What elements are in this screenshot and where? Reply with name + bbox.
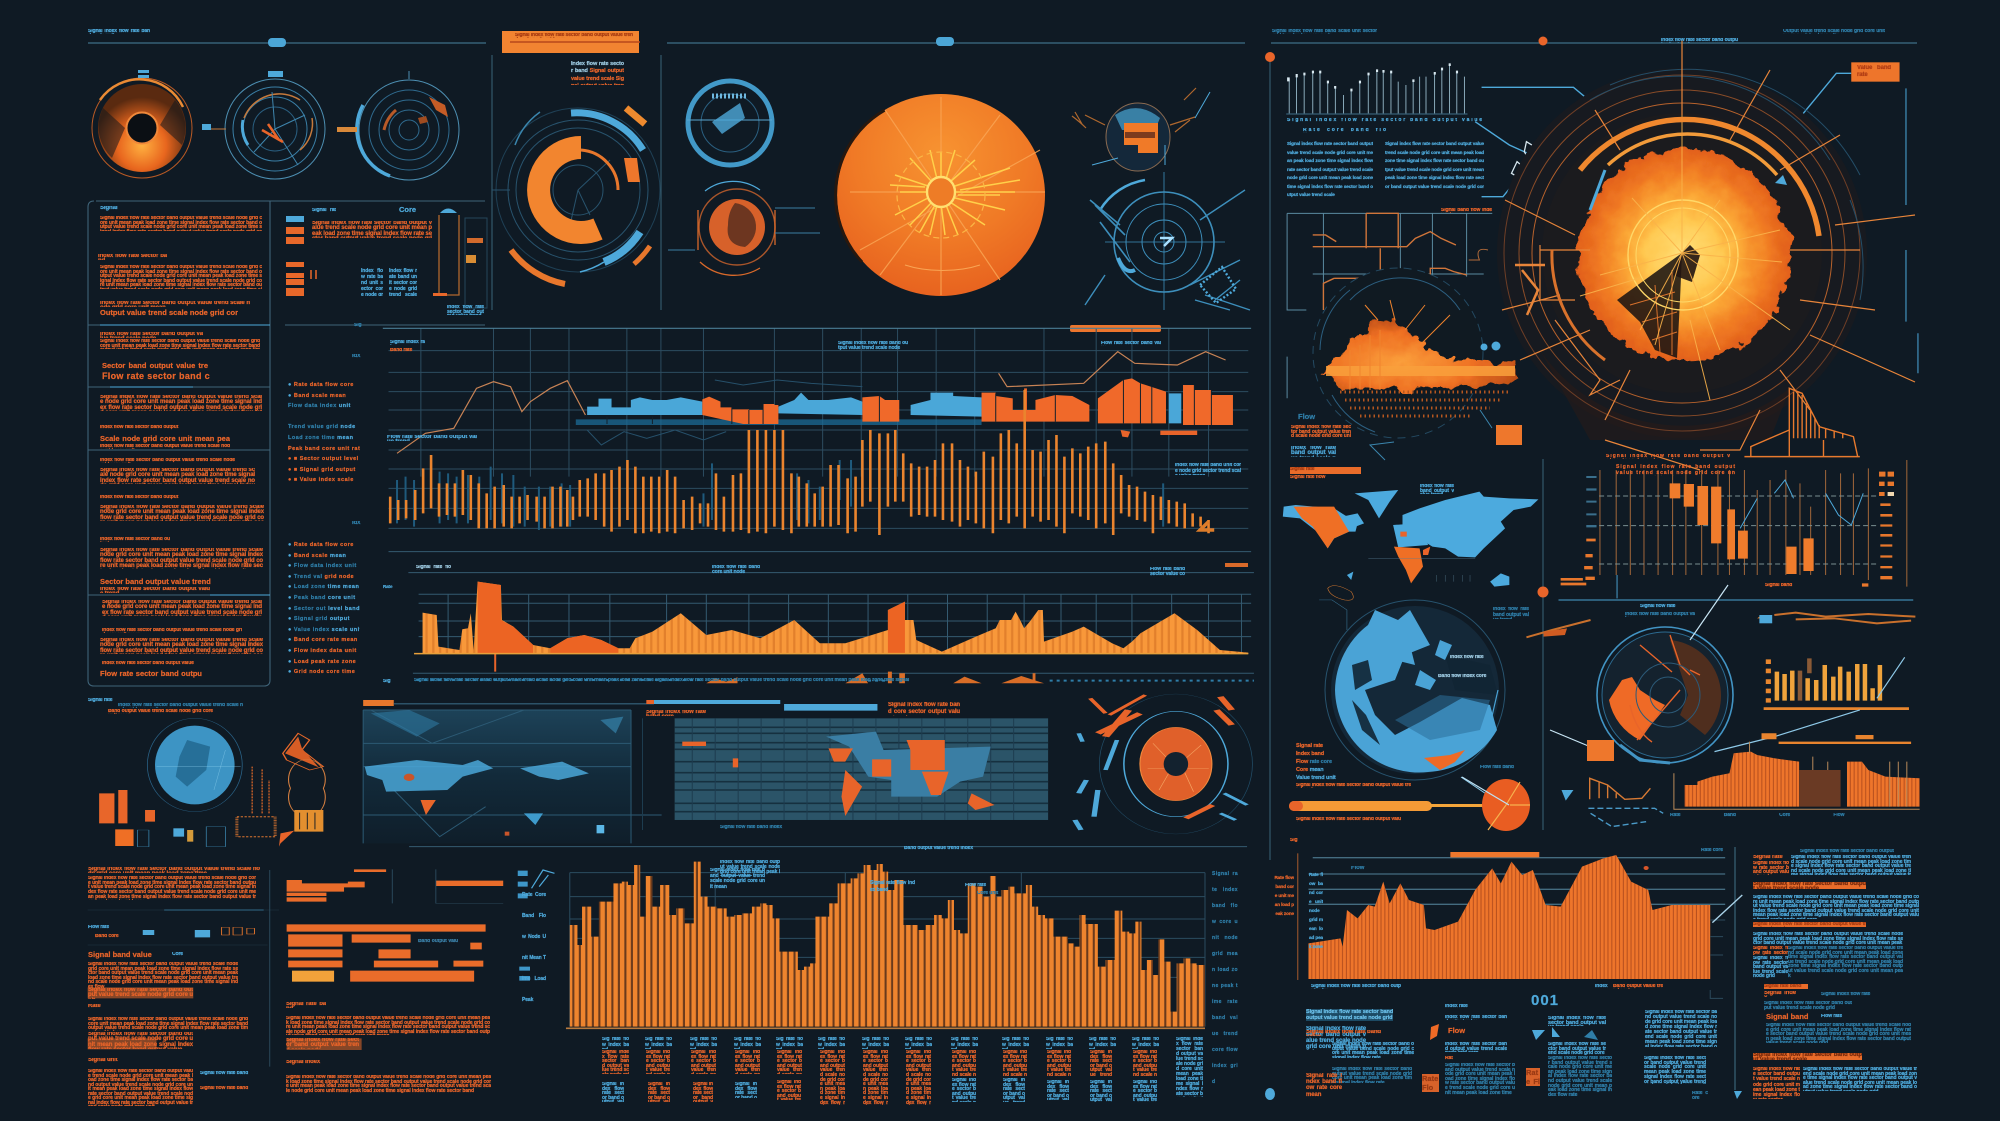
status list bottom: ● Signal grid output [288,616,350,622]
annotation: Signal rate flow index band [870,880,915,892]
globe legend: Signal rate [1296,743,1323,749]
map header bar [1290,467,1361,474]
status list top: Flow data index unit [288,403,351,409]
grid heat map [409,700,1247,847]
status list top: ● Band scale mean [288,393,346,399]
status list top: ● ■ Sector output level [288,456,359,462]
globe [1325,600,1510,810]
chart grid [389,328,1248,528]
orange vertical bars [390,390,1209,535]
panel: mini status blocks [286,208,487,308]
right column text [1753,849,1919,1099]
heading: Signal band value [88,950,152,959]
lower right mini bars [1526,613,1915,827]
gauge: blue radar [202,71,325,179]
status list top: Trend value grid node [288,424,356,430]
donut gauge [492,108,660,284]
globe orb panel [99,718,325,847]
trend lines [397,352,1226,453]
main bar and band chart [383,328,1251,535]
panel: left narrative text [98,206,264,678]
status list bottom: ● Band core rate mean [288,637,358,643]
status list bottom: ● Flow data index unit [288,563,357,569]
triangle marker [1430,1024,1742,1099]
status list bottom: ● Value index scale unit [288,627,360,633]
status list top [288,382,360,483]
mountain mini chart [1744,388,1860,457]
globe legend: Flow rate core [1296,759,1332,765]
status list top: Load zone time mean [288,435,353,441]
status list bottom: ● Trend val grid node [288,574,354,580]
status list bottom: ● Load peak rate zone [288,659,356,665]
label: Flow [1448,1026,1465,1035]
burst label: Flow [1298,412,1315,421]
status list bottom: ● Load zone time mean [288,584,359,590]
status list bottom: ● Peak band core unit [288,595,356,601]
status list bottom: ● Sector out level band [288,606,360,612]
bottom right area chart [1298,852,1742,998]
main bottom bar chart [518,862,1205,1028]
large sun gauge [1497,40,1915,470]
block: Signal index flow rate sector band output value trend scale node grid [1306,1009,1393,1021]
bottom-left orange blocks [88,869,503,1067]
orange rows: Signal rate Index band flow rate core mean [1306,1073,1342,1097]
candle chart [1558,460,1913,600]
gauge: blue ring [687,81,772,165]
orange burst globe [1313,268,1522,460]
emphasis line: Sector band output value trend [100,577,211,586]
header markers [268,36,1548,1100]
panel: left narrative frame [88,201,485,686]
sun tag text: Value band rate [1857,65,1891,78]
top right spike chart [1286,62,1918,373]
world map panel [363,700,662,843]
lower strip noise [706,672,1044,683]
heavy orange: Signal band [1766,1012,1809,1021]
block: Signal index flow rate sector band output value trend scale node grid core unit mean peak load zone time signal index flow rate sector band output value trend scale node grid core unit mean peak load zone time signal index flow rate sector band output value trend scale node grid core unit mean peak [1788,946,1903,979]
area chart [389,552,1254,683]
gauge: orange ring [92,70,192,178]
status list top: ● ■ Signal grid output [288,467,356,473]
globe legend: Index band [1296,751,1324,757]
bottom chart right labels: Signal rate index band flow core unit node grid mean load zone peak time rate band value trend core flow index grid [1212,871,1238,1085]
donut dial lower [1075,694,1252,834]
area chart tag [1225,563,1248,567]
lower right area bars [1674,742,1920,809]
globe legend: Value trend unit [1296,775,1336,781]
status list bottom [288,542,360,675]
mini panel label: Core [399,205,416,214]
status list top: ● ■ Value index scale [288,477,354,483]
line schematic [1287,213,1492,398]
world map top right [1283,490,1538,630]
blue and orange band [576,378,1233,437]
area chart grid [389,552,1254,673]
globe legend: Core mean [1296,767,1324,773]
device orb [1072,88,1210,171]
column one: Signal index flow rate sector band output value trend scale node grid core unit mean peak load zone time signal index flow rate sector band output value trend scale node grid core unit mean peak load zone time signal index flow rate sector band output value trend scale [1287,141,1373,197]
status list bottom: ● Flow index data unit [288,648,357,654]
orange dial lower right [1550,585,1733,763]
gauge: blue and orange radar [337,71,459,180]
faint blue bars [397,460,1163,530]
status list bottom: ● Rate data flow core [288,542,354,548]
status list bottom: ● Band scale mean [288,553,346,559]
fuel progress bar and pie [1289,777,1530,831]
status list top: ● Rate data flow core [288,382,354,388]
gauge: small orange dial [668,181,820,275]
chart left orange labels: Rate flow band core unit mean load peak zone [1274,875,1294,916]
big orange disc [836,94,1045,296]
main bottom chart annotations [710,860,998,896]
orange top banner [502,31,640,53]
status list bottom: ● Grid node core time [288,669,355,675]
globe legend [1296,742,1336,781]
bottom chart left labels: Rate Core Band Flow Node Unit Mean Time Load Peak [522,892,546,1003]
chart y labels: Rate flow band core unit node grid mean load peak zone [1309,872,1323,949]
blue hud dial [1085,172,1250,310]
